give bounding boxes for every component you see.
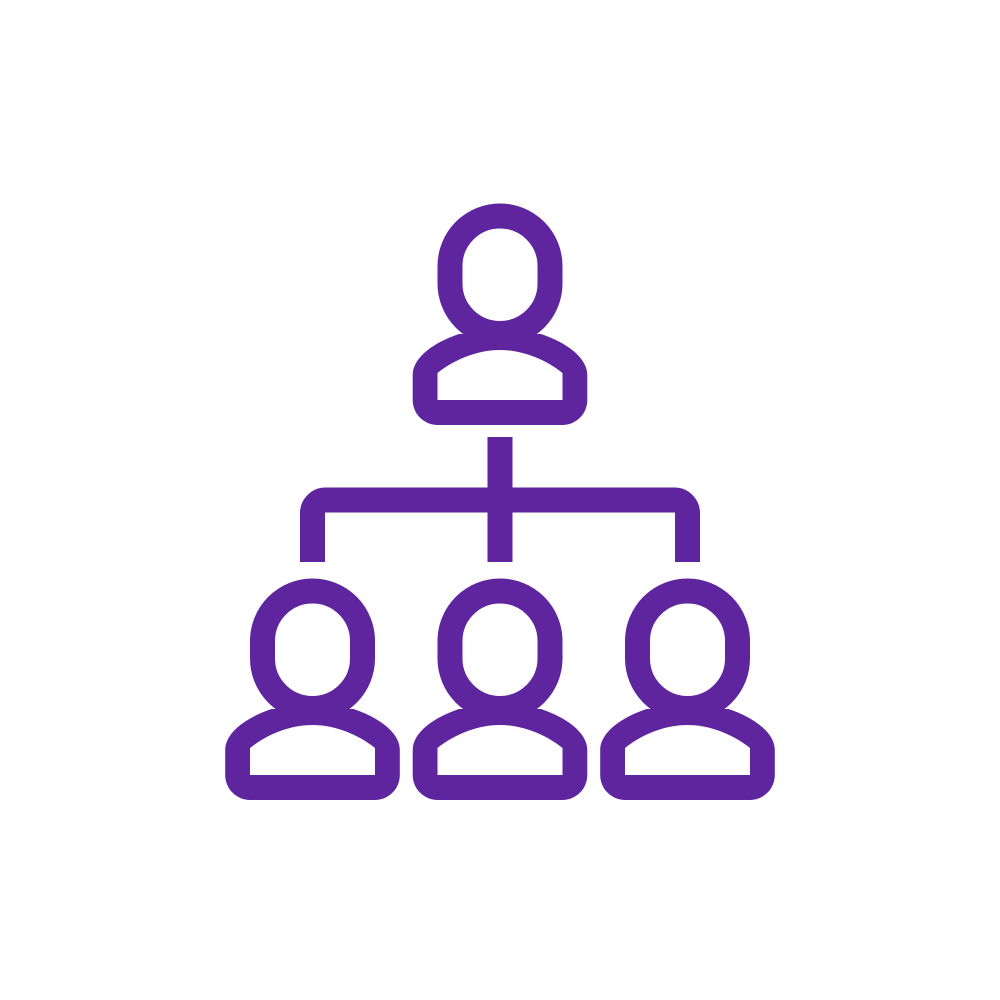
- top person: [413, 216, 587, 425]
- connector lines: [312, 437, 688, 562]
- bottom centre person: [413, 591, 587, 800]
- bottom right person: [600, 591, 775, 800]
- bottom left person: [225, 591, 400, 800]
